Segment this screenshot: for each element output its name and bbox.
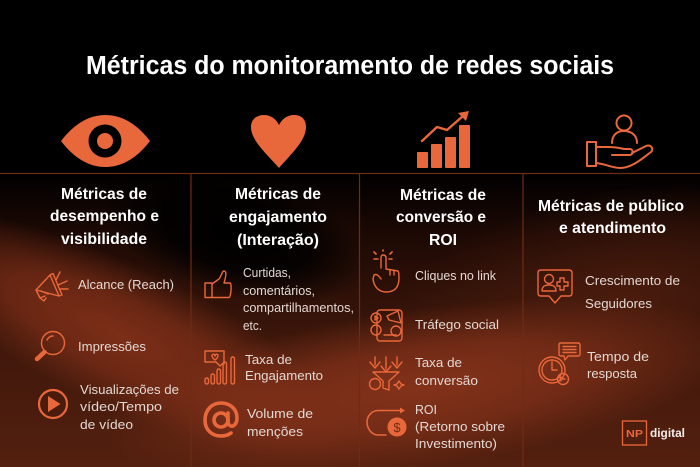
title: Métricas do monitoramento de redes sociais: [86, 52, 614, 80]
text: taxa de conversao: [415, 355, 478, 388]
heading: desempenho: visibilidade: [61, 231, 147, 248]
heading: engajamento: engajamento: [229, 209, 327, 226]
text: volume de mencoes: menções: [247, 424, 304, 439]
text: volume de mencoes: [247, 406, 313, 439]
panel: desempenho e visibilidade: [36, 115, 179, 432]
icon: add follower bubble: [538, 270, 572, 303]
heading: conversao: [396, 187, 486, 249]
text: visualizacoes: [80, 382, 179, 432]
logo: NP digital: NP: [626, 428, 643, 440]
text: crescimento: Crescimento de: [585, 273, 680, 288]
icon: eye: [61, 115, 150, 167]
text: volume de mencoes: Volume de: [247, 406, 313, 421]
text: taxa de conversao: conversão: [415, 373, 478, 388]
icon: at sign: [205, 403, 237, 436]
icon: ROI dollar: $: [393, 420, 401, 435]
text: alcance: Alcance (Reach): [78, 277, 174, 292]
text: visualizacoes: vídeo/Tempo: [80, 399, 162, 414]
panel: conversao e ROI: [367, 111, 505, 451]
text: ROI: Investimento): [415, 436, 497, 451]
icon: play button: [39, 390, 67, 418]
text: crescimento: [585, 273, 680, 311]
text: cliques: Cliques no link: [415, 268, 496, 283]
icon: megaphone: [36, 272, 68, 301]
text: taxa de conversao: Taxa de: [415, 355, 462, 370]
icon: growth chart: [417, 111, 470, 168]
text: trafego: Tráfego social: [415, 317, 499, 332]
text: tempo de resposta: [587, 349, 649, 381]
heading: publico: [538, 198, 684, 237]
panel: publico e atendimento: [538, 116, 685, 445]
text: curtidas: Curtidas,: [243, 265, 291, 280]
heading: publico: Métricas de público: [538, 198, 684, 215]
heading: engajamento: [229, 186, 327, 249]
heading: desempenho: [50, 186, 159, 248]
text: ROI: ROI: [415, 402, 437, 417]
heading: engajamento: (Interação): [237, 232, 319, 249]
text: visualizacoes: Visualizações de: [80, 382, 179, 397]
heading: engajamento: Métricas de: [235, 186, 321, 203]
logo: NP digital: digital: [650, 426, 685, 440]
heading: conversao: conversão e: [396, 209, 486, 226]
text: taxa de engajamento: Taxa de: [245, 352, 292, 367]
text: visualizacoes: de vídeo: [80, 417, 133, 432]
icon: magnifier: [37, 332, 64, 359]
text: crescimento: Seguidores: [585, 296, 652, 311]
icon: engagement bars: [205, 351, 234, 384]
text: impressoes: Impressões: [78, 339, 146, 354]
heading: publico: e atendimento: [559, 220, 666, 237]
logo: NP digital: [622, 421, 685, 445]
heading: conversao: ROI: [429, 232, 457, 249]
icon: thumbs up: [205, 271, 231, 298]
text: curtidas: compartilhamentos,: [243, 300, 354, 315]
heading: desempenho: Métricas de: [61, 186, 147, 203]
text: tempo de resposta: resposta: [587, 366, 638, 381]
text: curtidas: [243, 265, 354, 333]
icon: heart: [251, 115, 306, 168]
text: tempo de resposta: Tempo de: [587, 349, 649, 364]
text: taxa de engajamento: [245, 352, 323, 383]
text: ROI: (Retorno sobre: [415, 419, 505, 434]
icon: click hand: [373, 250, 399, 292]
column dividers: [0, 174, 700, 467]
icon: social traffic phone: [371, 310, 402, 341]
text: ROI: [415, 402, 505, 451]
icon: clock with chat: [539, 343, 580, 384]
heading: desempenho: desempenho e: [50, 208, 159, 225]
heading: conversao: Métricas de: [400, 187, 486, 204]
text: taxa de engajamento: Engajamento: [245, 368, 323, 383]
text: curtidas: comentários,: [243, 283, 315, 298]
icon: ROI dollar: [367, 408, 406, 436]
panel: engajamento: [205, 115, 354, 439]
icon: conversion funnel: [370, 357, 404, 390]
text: curtidas: etc.: [243, 318, 262, 333]
icon: hand with person: [587, 116, 652, 168]
